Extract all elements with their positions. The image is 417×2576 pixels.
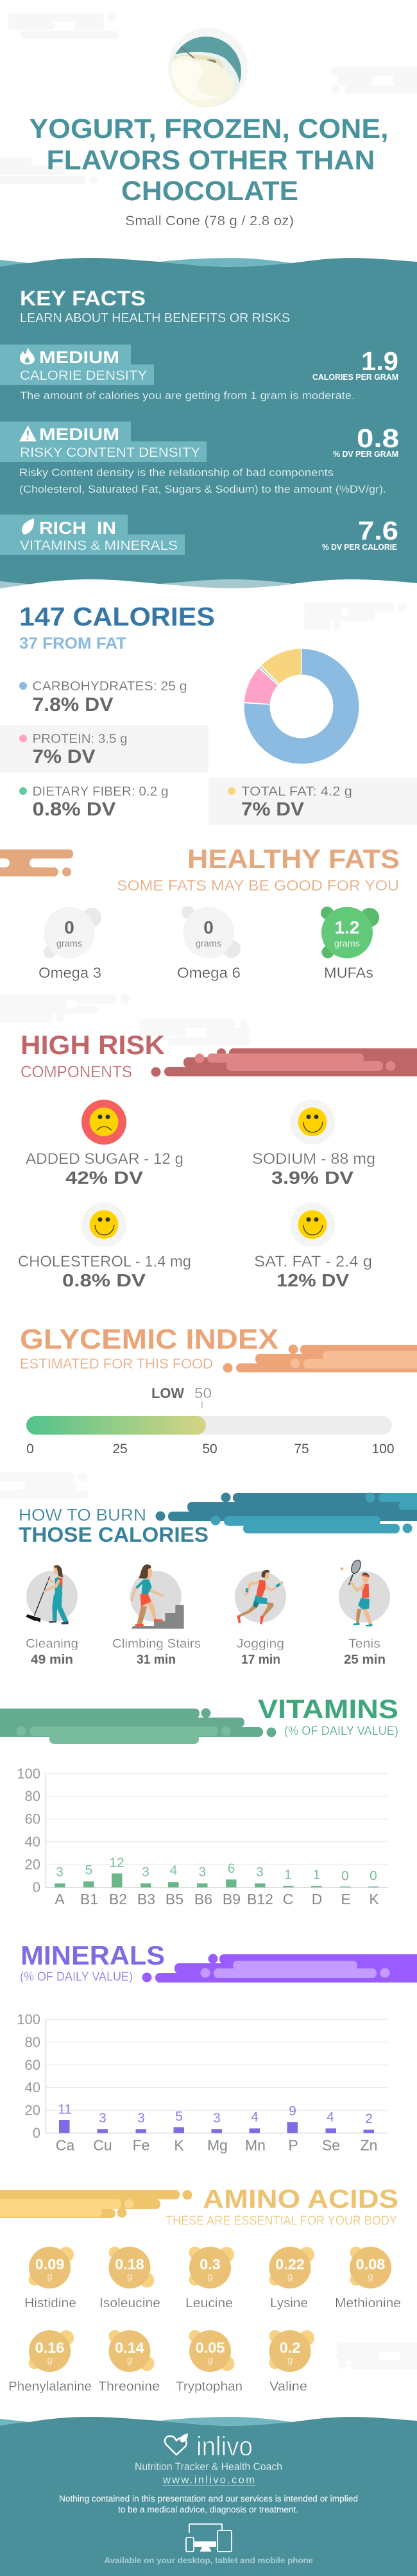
activity: tennis <box>339 1558 390 1667</box>
amino: isoleucine: Isoleucine <box>99 2296 160 2310</box>
bar chart: minerals: Cu <box>93 2137 112 2154</box>
panel: footer <box>0 2417 417 2576</box>
gauge scale: 0 <box>26 1442 34 1456</box>
icon: person jogging <box>235 1570 286 1625</box>
legend: protein <box>0 725 208 772</box>
fact: risky content density: Risky Content density is the relationship of bad components <box>19 466 334 479</box>
amino: isoleucine: g <box>127 2271 132 2282</box>
bar chart: vitamins: 3 <box>142 1864 149 1879</box>
risk: sodium <box>252 1100 375 1188</box>
amino: phenylalanine: Phenylalanine <box>8 2380 92 2394</box>
header background clouds <box>0 13 417 184</box>
MUFAs: grams <box>334 939 360 950</box>
fact: rich in vitamins and minerals: VITAMINS & MINERALS <box>20 538 178 553</box>
bar chart: minerals: Zn <box>361 2137 377 2154</box>
fact: risky content density: 0.8 <box>357 423 399 453</box>
bar chart: minerals: 100 <box>17 2011 40 2027</box>
footer tagline and website: Nutrition Tracker & Health Coach <box>135 2461 282 2473</box>
disclaimer: Nothing contained in this presentation and our services is intended or implied <box>59 2494 358 2503</box>
bar chart: minerals: Mg <box>207 2137 228 2154</box>
bar chart: vitamins: 80 <box>25 1788 40 1804</box>
panel: glycemic index <box>20 1324 417 1456</box>
amino: phenylalanine: 0.16 <box>35 2339 64 2356</box>
fact: rich in vitamins and minerals <box>0 515 398 555</box>
bar chart: vitamins: 6 <box>228 1861 235 1876</box>
high risk heading <box>21 1030 165 1081</box>
key facts heading: KEY FACTS <box>20 287 146 310</box>
legend: carbohydrates: CARBOHYDRATES: 25 g <box>32 679 187 694</box>
logo: inlivo <box>165 2431 253 2461</box>
gauge scale: 75 <box>294 1442 309 1456</box>
footer tagline and website: www.inlivo.com <box>162 2474 255 2486</box>
title: CHOCOLATE <box>121 176 298 207</box>
minerals heading: (% OF DAILY VALUE) <box>20 1970 133 1984</box>
bar chart: vitamins: 0 <box>341 1869 349 1884</box>
amino: leucine <box>185 2247 234 2310</box>
amino: threonine: Threonine <box>98 2380 160 2394</box>
high risk heading: HIGH RISK <box>21 1030 165 1060</box>
omega 6: grams <box>196 939 221 950</box>
amino: leucine: g <box>207 2271 213 2282</box>
risk: cholesterol: 0.8% DV <box>62 1270 146 1290</box>
availability note: Available on your desktop, tablet and mobile phone <box>104 2555 313 2565</box>
bar chart: minerals: K <box>174 2137 184 2154</box>
legend: protein: 7% DV <box>32 746 95 767</box>
bar chart: minerals <box>17 2011 388 2154</box>
activity: tennis: 25 min <box>344 1653 386 1667</box>
title <box>30 114 389 207</box>
bar chart: minerals: 2 <box>365 2111 373 2126</box>
bar chart: vitamins: B12 <box>247 1891 273 1907</box>
bar chart: vitamins: 1 <box>313 1868 320 1882</box>
bar chart: minerals: 3 <box>137 2111 145 2126</box>
omega 6 <box>177 906 241 981</box>
calories heading: 147 CALORIES <box>19 602 215 631</box>
glycemic score: LOW <box>151 1385 184 1401</box>
risk: added sugar <box>26 1100 183 1188</box>
amino: phenylalanine <box>8 2330 92 2394</box>
fact: rich in vitamins and minerals: RICH IN <box>39 518 116 538</box>
risk: sodium: 3.9% DV <box>271 1168 353 1188</box>
burn heading <box>19 1505 208 1546</box>
amino: isoleucine: 0.18 <box>115 2256 144 2273</box>
bar chart: minerals: Ca <box>56 2137 74 2154</box>
bar chart: minerals: Fe <box>133 2137 149 2154</box>
legend: carbohydrates <box>19 679 187 715</box>
icon: happy face <box>298 1210 327 1239</box>
bar chart: vitamins: 4 <box>170 1863 178 1878</box>
amino: threonine: 0.14 <box>115 2339 144 2356</box>
bar chart: vitamins: 60 <box>25 1811 40 1827</box>
fact: calorie density: CALORIE DENSITY <box>20 368 147 383</box>
MUFAs: 1.2 <box>335 917 359 937</box>
glycemic score <box>151 1385 212 1408</box>
burn heading: HOW TO BURN <box>19 1505 146 1524</box>
title: YOGURT, FROZEN, CONE, <box>30 114 389 144</box>
amino: histidine: g <box>47 2271 53 2282</box>
disclaimer <box>59 2494 358 2514</box>
gauge scale <box>26 1442 395 1456</box>
fact: calorie density <box>0 345 398 402</box>
bar chart: minerals: Se <box>322 2137 340 2154</box>
amino: isoleucine <box>99 2247 160 2310</box>
amino: lysine <box>269 2247 314 2310</box>
vitamins heading <box>258 1694 398 1738</box>
gauge scale: 25 <box>112 1442 128 1456</box>
activity: tennis: Tenis <box>348 1637 380 1651</box>
bar chart: minerals: 60 <box>25 2057 40 2073</box>
glycemic score: 50 <box>194 1385 212 1401</box>
healthy fats heading: SOME FATS MAY BE GOOD FOR YOU <box>117 877 399 894</box>
donut chart <box>244 649 359 764</box>
amino: leucine: 0.3 <box>200 2256 221 2273</box>
activity: cleaning <box>26 1565 78 1667</box>
gauge scale: 100 <box>371 1442 395 1456</box>
bar chart: minerals: 4 <box>327 2110 334 2125</box>
icon: person playing tennis <box>339 1558 390 1626</box>
bar chart: vitamins: 3 <box>256 1864 264 1879</box>
vitamins heading: (% OF DAILY VALUE) <box>284 1725 398 1738</box>
panel: healthy fats <box>0 844 400 981</box>
activity: cleaning: Cleaning <box>26 1637 78 1651</box>
bar chart: vitamins: C <box>283 1891 293 1907</box>
footer tagline and website <box>135 2461 282 2486</box>
omega 3 <box>38 907 101 981</box>
MUFAs: MUFAs <box>324 964 373 981</box>
icon: warning triangle <box>19 425 37 441</box>
icon: happy face <box>90 1210 118 1239</box>
amino: valine: g <box>287 2355 293 2366</box>
omega 3: Omega 3 <box>38 964 101 981</box>
amino: leucine: Leucine <box>185 2296 233 2310</box>
fact: risky content density: RISKY CONTENT DENSITY <box>20 445 200 460</box>
amino: lysine: 0.22 <box>275 2256 305 2273</box>
minerals heading: MINERALS <box>21 1940 165 1970</box>
fact: rich in vitamins and minerals: 7.6 <box>358 516 398 545</box>
title: FLAVORS OTHER THAN <box>46 145 375 176</box>
risk: cholesterol: CHOLESTEROL - 1.4 mg <box>18 1253 191 1270</box>
amino: tryptophan: Tryptophan <box>176 2380 243 2394</box>
bar chart: minerals: 80 <box>25 2034 40 2051</box>
amino: methionine: g <box>368 2271 373 2282</box>
fact: calorie density: The amount of calories you are getting from 1 gram is moderate. <box>20 389 355 402</box>
panel: high risk <box>0 994 417 1290</box>
bar chart: minerals: 40 <box>25 2079 40 2095</box>
minerals heading <box>20 1940 165 1984</box>
activity: jogging <box>235 1570 286 1667</box>
icon: person sweeping <box>26 1565 78 1625</box>
risk: sodium: SODIUM - 88 mg <box>252 1150 375 1168</box>
fact: risky content density: MEDIUM <box>39 425 119 444</box>
panel: key facts <box>0 258 417 588</box>
bar chart: vitamins: 12 <box>109 1855 124 1870</box>
icon: leaf <box>22 518 34 534</box>
risk: added sugar: ADDED SUGAR - 12 g <box>26 1150 183 1168</box>
panel: how to burn those calories <box>0 1472 417 1667</box>
bar chart: vitamins: B6 <box>194 1891 212 1907</box>
amino acids heading <box>166 2184 398 2228</box>
amino: histidine: Histidine <box>24 2296 76 2310</box>
bar chart: minerals: 9 <box>289 2104 296 2119</box>
serving size subtitle: Small Cone (78 g / 2.8 oz) <box>125 214 294 228</box>
legend: dietary fiber: 0.8% DV <box>32 799 115 820</box>
bar chart: minerals: 20 <box>25 2102 40 2119</box>
fact: calorie density: CALORIES PER GRAM <box>312 372 398 382</box>
bar chart: vitamins: 3 <box>199 1864 206 1879</box>
amino: threonine: g <box>127 2355 132 2366</box>
risk: saturated fat: 12% DV <box>277 1270 349 1290</box>
logo: inlivo: inlivo <box>196 2431 253 2461</box>
bar chart: vitamins: D <box>312 1891 322 1907</box>
bar chart: vitamins: B3 <box>137 1891 155 1907</box>
bar chart: minerals: 3 <box>213 2111 221 2126</box>
activity: climbing stairs <box>112 1564 201 1667</box>
bar chart: vitamins <box>17 1766 388 1907</box>
activity: cleaning: 49 min <box>31 1653 73 1667</box>
legend: total fat: TOTAL FAT: 4.2 g <box>241 785 352 799</box>
omega 3: grams <box>56 939 82 950</box>
omega 6: Omega 6 <box>177 964 241 981</box>
amino: methionine <box>335 2247 401 2310</box>
bar chart: vitamins: 100 <box>17 1766 40 1782</box>
amino: valine <box>269 2330 314 2394</box>
bar chart: minerals: 3 <box>99 2111 106 2126</box>
panel: amino acids <box>0 2184 417 2394</box>
risk: saturated fat: SAT. FAT - 2.4 g <box>254 1253 372 1270</box>
fact: risky content density <box>0 422 399 495</box>
glycemic heading: GLYCEMIC INDEX <box>20 1324 278 1355</box>
icon: flame <box>20 348 35 364</box>
bar chart: minerals: 0 <box>33 2125 40 2141</box>
fact: risky content density: % DV PER GRAM <box>333 449 398 459</box>
activity: jogging: Jogging <box>237 1637 284 1651</box>
amino acids heading: AMINO ACIDS <box>203 2184 398 2213</box>
panel: vitamins <box>0 1694 398 1907</box>
amino: valine: Valine <box>269 2380 307 2394</box>
amino: valine: 0.2 <box>280 2339 300 2356</box>
key facts heading <box>20 287 290 325</box>
glycemic heading: ESTIMATED FOR THIS FOOD <box>20 1356 213 1372</box>
bar chart: vitamins: E <box>341 1891 351 1907</box>
vitamins heading: VITAMINS <box>258 1694 398 1724</box>
amino: phenylalanine: g <box>47 2355 53 2366</box>
risk: cholesterol <box>18 1202 191 1290</box>
risk: added sugar: 42% DV <box>65 1168 143 1188</box>
legend: protein: PROTEIN: 3.5 g <box>32 732 127 746</box>
bar chart: minerals: 5 <box>175 2110 183 2124</box>
legend: total fat: 7% DV <box>241 799 304 820</box>
icon: person climbing stairs <box>130 1564 184 1629</box>
amino: methionine: Methionine <box>335 2296 401 2310</box>
omega 3: 0 <box>64 917 74 937</box>
icon: happy face <box>298 1107 327 1136</box>
amino: lysine: g <box>287 2271 293 2282</box>
legend: total fat <box>208 778 417 825</box>
bar chart: vitamins: 5 <box>85 1863 92 1878</box>
omega 6: 0 <box>203 917 214 937</box>
bar chart: vitamins: 0 <box>370 1869 377 1884</box>
amino: tryptophan <box>176 2330 243 2394</box>
legend: dietary fiber: DIETARY FIBER: 0.2 g <box>32 785 168 799</box>
high risk heading: COMPONENTS <box>21 1063 132 1081</box>
bar chart: vitamins: B9 <box>223 1891 241 1907</box>
bar chart: vitamins: B1 <box>80 1891 98 1907</box>
icon: sad face <box>90 1107 118 1136</box>
bar chart: vitamins: 40 <box>25 1834 40 1850</box>
bar chart: vitamins: B5 <box>166 1891 183 1907</box>
gauge scale: 50 <box>202 1442 217 1456</box>
bar chart: minerals: Mn <box>245 2137 266 2154</box>
fact: calorie density: MEDIUM <box>39 348 119 367</box>
amino: histidine <box>24 2247 76 2310</box>
amino: threonine <box>98 2330 160 2394</box>
bar chart: vitamins: 0 <box>33 1879 40 1895</box>
fact: calorie density: 1.9 <box>361 346 398 376</box>
fact: rich in vitamins and minerals: % DV PER CALORIE <box>322 542 397 552</box>
burn heading: THOSE CALORIES <box>19 1523 208 1546</box>
activity: climbing stairs: 31 min <box>137 1653 176 1667</box>
amino acids heading: THESE ARE ESSENTIAL FOR YOUR BODY <box>166 2213 397 2228</box>
bar chart: minerals: 11 <box>58 2102 72 2117</box>
glycemic gauge bar <box>26 1416 392 1435</box>
glycemic heading <box>20 1324 278 1372</box>
activity: climbing stairs: Climbing Stairs <box>112 1637 201 1651</box>
amino: tryptophan: g <box>207 2355 213 2366</box>
calories heading: 37 FROM FAT <box>19 635 126 653</box>
icon: desktop, tablet and phone <box>186 2524 232 2552</box>
MUFAs <box>321 907 379 981</box>
amino: tryptophan: 0.05 <box>196 2339 225 2356</box>
bar chart: vitamins: 1 <box>284 1868 292 1882</box>
bar chart: vitamins: A <box>55 1891 65 1907</box>
legend: carbohydrates: 7.8% DV <box>32 694 113 715</box>
healthy fats heading <box>117 844 400 894</box>
panel: calories <box>0 602 417 825</box>
calories heading <box>19 602 215 653</box>
food photo: frozen yogurt in a bowl <box>168 28 248 112</box>
key facts heading: LEARN ABOUT HEALTH BENEFITS OR RISKS <box>20 311 290 325</box>
bar chart: minerals: P <box>288 2137 298 2154</box>
risk: saturated fat <box>254 1202 372 1290</box>
disclaimer: to be a medical advice, diagnosis or treatment. <box>118 2505 298 2514</box>
amino: lysine: Lysine <box>270 2296 308 2310</box>
amino: methionine: 0.08 <box>356 2256 385 2273</box>
bar chart: vitamins: B2 <box>109 1891 127 1907</box>
panel: minerals <box>17 1940 417 2154</box>
bar chart: vitamins: 20 <box>25 1857 40 1872</box>
bar chart: minerals: 4 <box>251 2110 259 2125</box>
bar chart: vitamins: 3 <box>56 1864 64 1879</box>
healthy fats heading: HEALTHY FATS <box>187 844 400 874</box>
fact: risky content density: (Cholesterol, Saturated Fat, Sugars & Sodium) to the amount (%DV/gr). <box>19 483 386 495</box>
activity: jogging: 17 min <box>241 1653 280 1667</box>
amino: histidine: 0.09 <box>35 2256 64 2273</box>
bar chart: vitamins: K <box>369 1891 379 1907</box>
legend: dietary fiber <box>19 785 168 820</box>
